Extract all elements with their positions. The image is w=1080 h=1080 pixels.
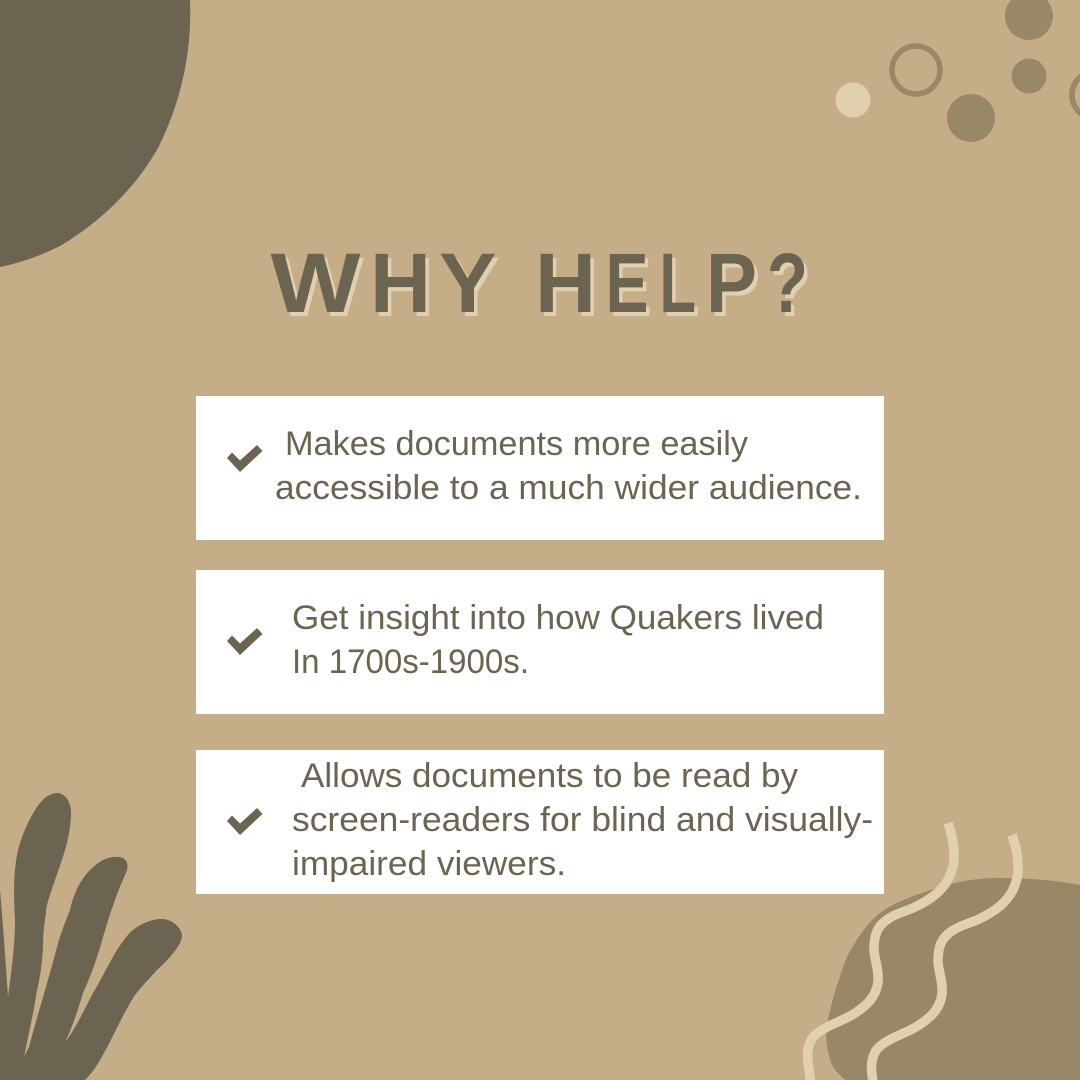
- text: accessibility: [275, 425, 862, 507]
- icon: check mark: [227, 445, 262, 472]
- title: H: [538, 240, 600, 334]
- text: screen-readers: impaired viewers.: [292, 845, 566, 883]
- icon: check mark: [227, 808, 262, 835]
- decorative circles: top-right: [836, 0, 1080, 142]
- title: P: [710, 240, 760, 334]
- blob: top-left: [0, 0, 190, 267]
- title: H: [535, 236, 596, 330]
- title: W: [274, 240, 365, 334]
- text: accessibility: accessible to a much wider audience.: [275, 469, 862, 507]
- wavy lines: bottom-right: [808, 823, 1018, 1080]
- panel: insight: [196, 570, 884, 714]
- text: insight: In 1700s-1900s.: [292, 643, 529, 681]
- title: E: [606, 236, 648, 330]
- title: W: [270, 236, 361, 330]
- title: ?: [770, 240, 812, 334]
- plant: bottom-left: [0, 793, 182, 1080]
- panel: screen-readers: [196, 750, 884, 894]
- title: P: [706, 236, 757, 330]
- text: screen-readers: screen-readers for blind and visually-: [292, 801, 873, 839]
- title: L: [663, 240, 700, 334]
- title: H: [374, 240, 434, 334]
- text: accessibility: Makes documents more easily: [285, 425, 748, 463]
- text: screen-readers: Allows documents to be read by: [301, 757, 798, 795]
- icon: check mark: [227, 628, 262, 655]
- title: H: [370, 236, 431, 330]
- title: E: [609, 240, 652, 334]
- title: L: [660, 236, 696, 330]
- text: insight: [292, 599, 824, 681]
- title: [270, 236, 812, 334]
- title: ?: [767, 236, 808, 330]
- text: screen-readers: [292, 757, 873, 883]
- text: insight: Get insight into how Quakers lived: [292, 599, 824, 637]
- title: Y: [442, 240, 499, 334]
- blob: bottom-right: [826, 878, 1080, 1080]
- panel: accessibility: [196, 396, 884, 540]
- title: Y: [439, 236, 495, 330]
